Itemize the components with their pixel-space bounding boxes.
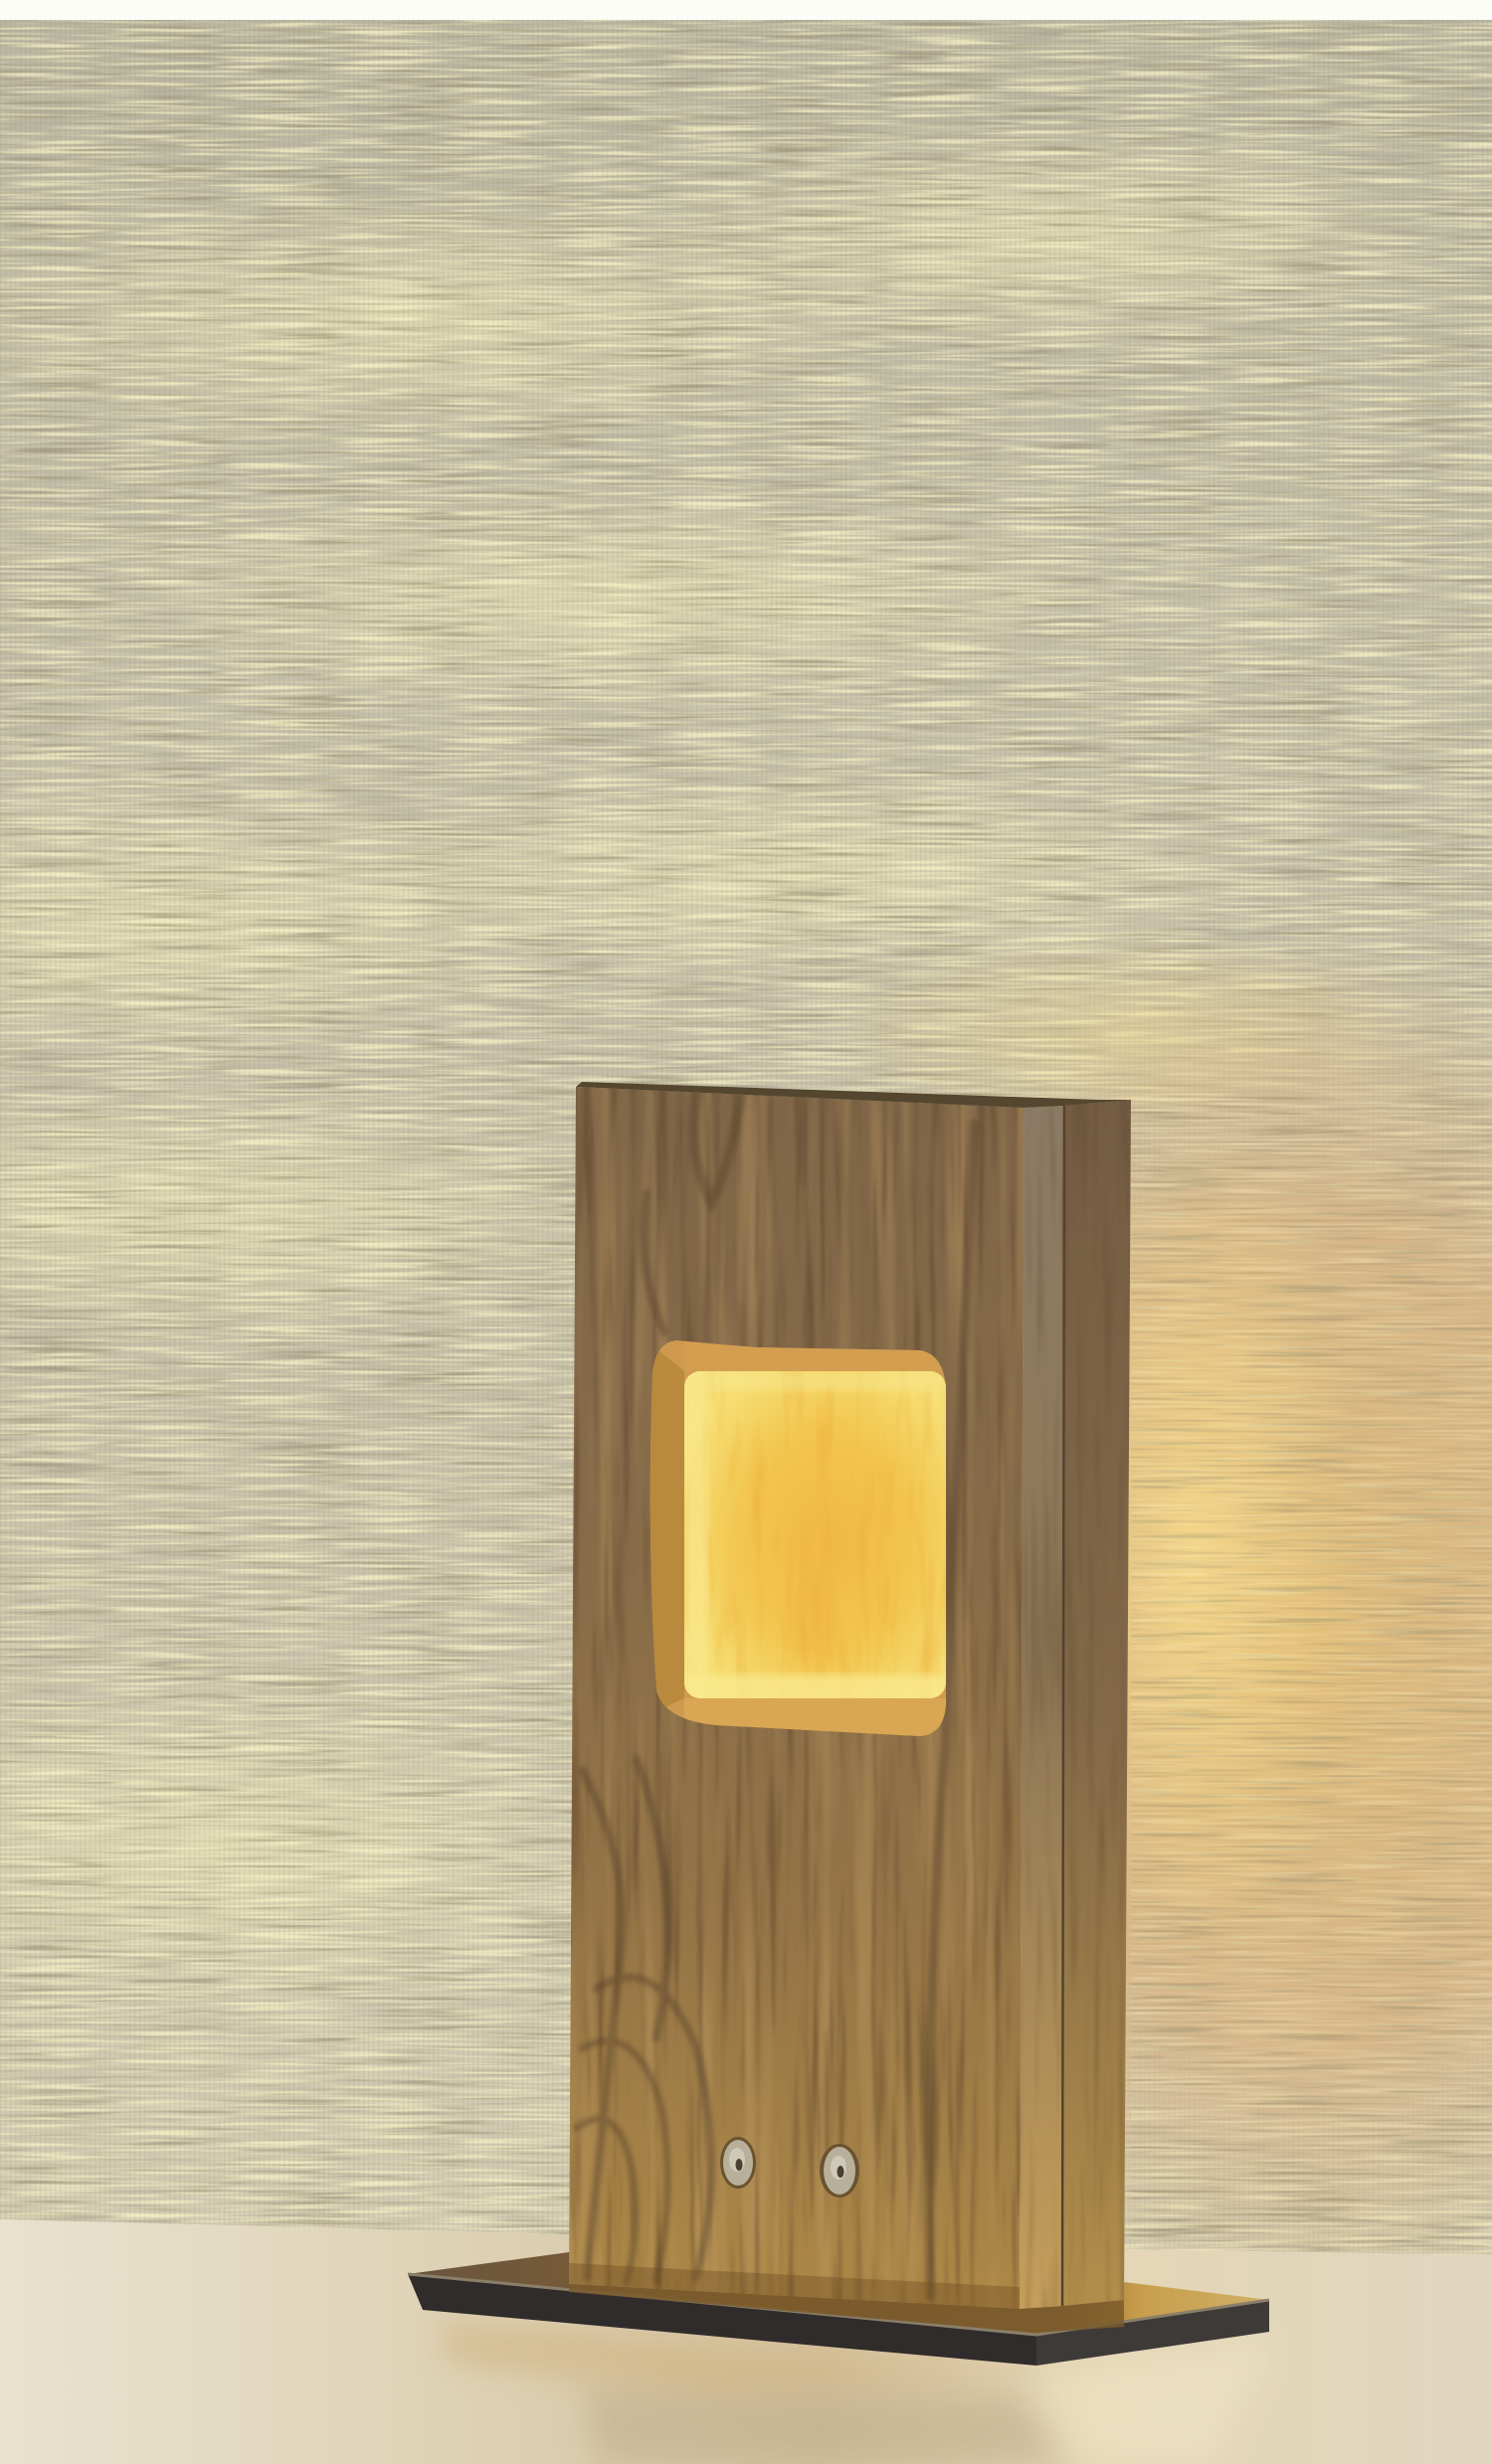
- gold sheen patches: [0, 155, 1343, 1945]
- warm light glow on wall: [1021, 985, 1492, 2253]
- lit window recess: [651, 1340, 946, 1736]
- switch screw right: [820, 2144, 859, 2198]
- top white strip: [0, 0, 1492, 20]
- lamp base plate: [408, 2252, 1269, 2366]
- recess frame: [637, 1332, 955, 1750]
- lamp: [408, 1082, 1269, 2366]
- lamp front face with wood grain: [557, 1084, 1034, 2317]
- floor / table surface: [0, 2219, 1492, 2464]
- switch screw left: [720, 2137, 756, 2189]
- lamp side strips: [1015, 1094, 1134, 2317]
- cathedral grain figures: [577, 1094, 975, 2297]
- glowing panel: [684, 1371, 946, 1702]
- lamp reflection on table: [582, 2386, 1064, 2464]
- lamp top edge: [576, 1082, 1131, 1108]
- lower reflection line: [569, 2263, 1020, 2309]
